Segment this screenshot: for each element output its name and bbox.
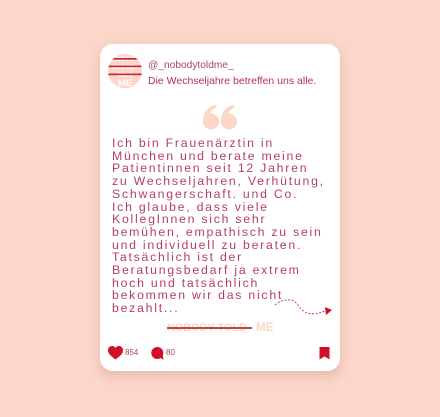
icon: comment bubble (151, 347, 164, 360)
icon: quotation mark (203, 105, 237, 130)
quote text: bekommen wir das nicht (112, 288, 283, 302)
quote text: und individuell zu beraten. (112, 238, 302, 252)
quote text: zu Wechseljahren, Verhütung, (112, 174, 325, 188)
icon: avatar logo: NOBODY (112, 57, 138, 63)
quote text (112, 136, 325, 315)
quote text: Tatsächlich ist der (112, 250, 243, 264)
quote text: Schwangerschaft. und Co. (112, 187, 298, 201)
quote text: Beratungsbedarf ja extrem (112, 263, 301, 277)
panel: post card (100, 44, 340, 371)
icon: heart (108, 346, 123, 360)
quote text: bemühen, empathisch zu sein (112, 225, 323, 239)
logo: nobody told me: ME (256, 322, 273, 334)
account handle: @_nobodytoldme_ (148, 60, 234, 71)
quote text: München und berate meine (112, 149, 304, 163)
icon: avatar logo (108, 54, 142, 88)
logo: nobody told me: NOBODY TOLD (167, 322, 247, 334)
icon: bookmark (320, 347, 330, 360)
quote text: Ich glaube, dass viele (112, 200, 269, 214)
quote text: Ich bin Frauenärztin in (112, 136, 274, 150)
comments count: 80 (166, 348, 175, 357)
arrow: dashed curve (274, 299, 332, 315)
likes count: 854 (125, 348, 138, 357)
quote text: KollegInnen sich sehr (112, 212, 266, 226)
quote text: bezahlt... (112, 301, 179, 315)
icon: avatar logo: NOBODY (112, 65, 138, 71)
quote text: hoch und tatsächlich (112, 276, 259, 290)
icon: avatar logo: TOLD (117, 73, 134, 79)
headline: Die Wechseljahre betreffen uns alle. (148, 75, 316, 87)
quote text: Patientinnen seit 12 Jahren (112, 161, 308, 175)
